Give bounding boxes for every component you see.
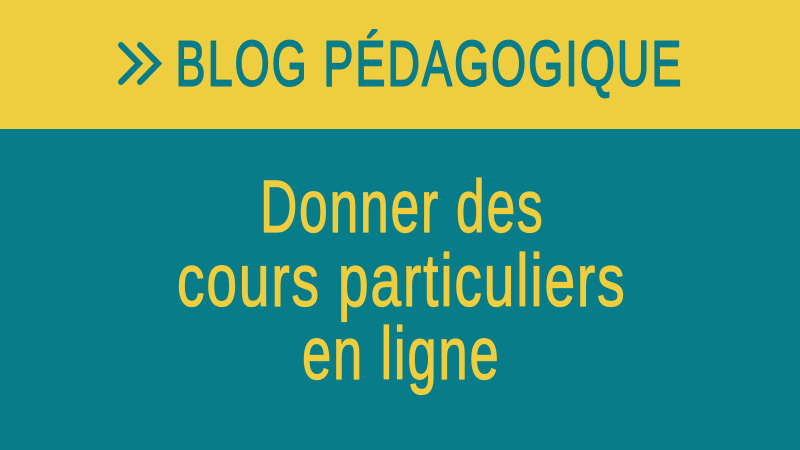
title: donner des cours particuliers en ligne: Donner des <box>260 165 544 248</box>
title: donner des cours particuliers en ligne: cours particuliers <box>177 239 626 322</box>
title: donner des cours particuliers en ligne: en ligne <box>302 312 500 395</box>
title: donner des cours particuliers en ligne <box>177 165 626 395</box>
icon: double chevron <box>121 45 158 82</box>
panel: yellow header band <box>0 0 800 129</box>
